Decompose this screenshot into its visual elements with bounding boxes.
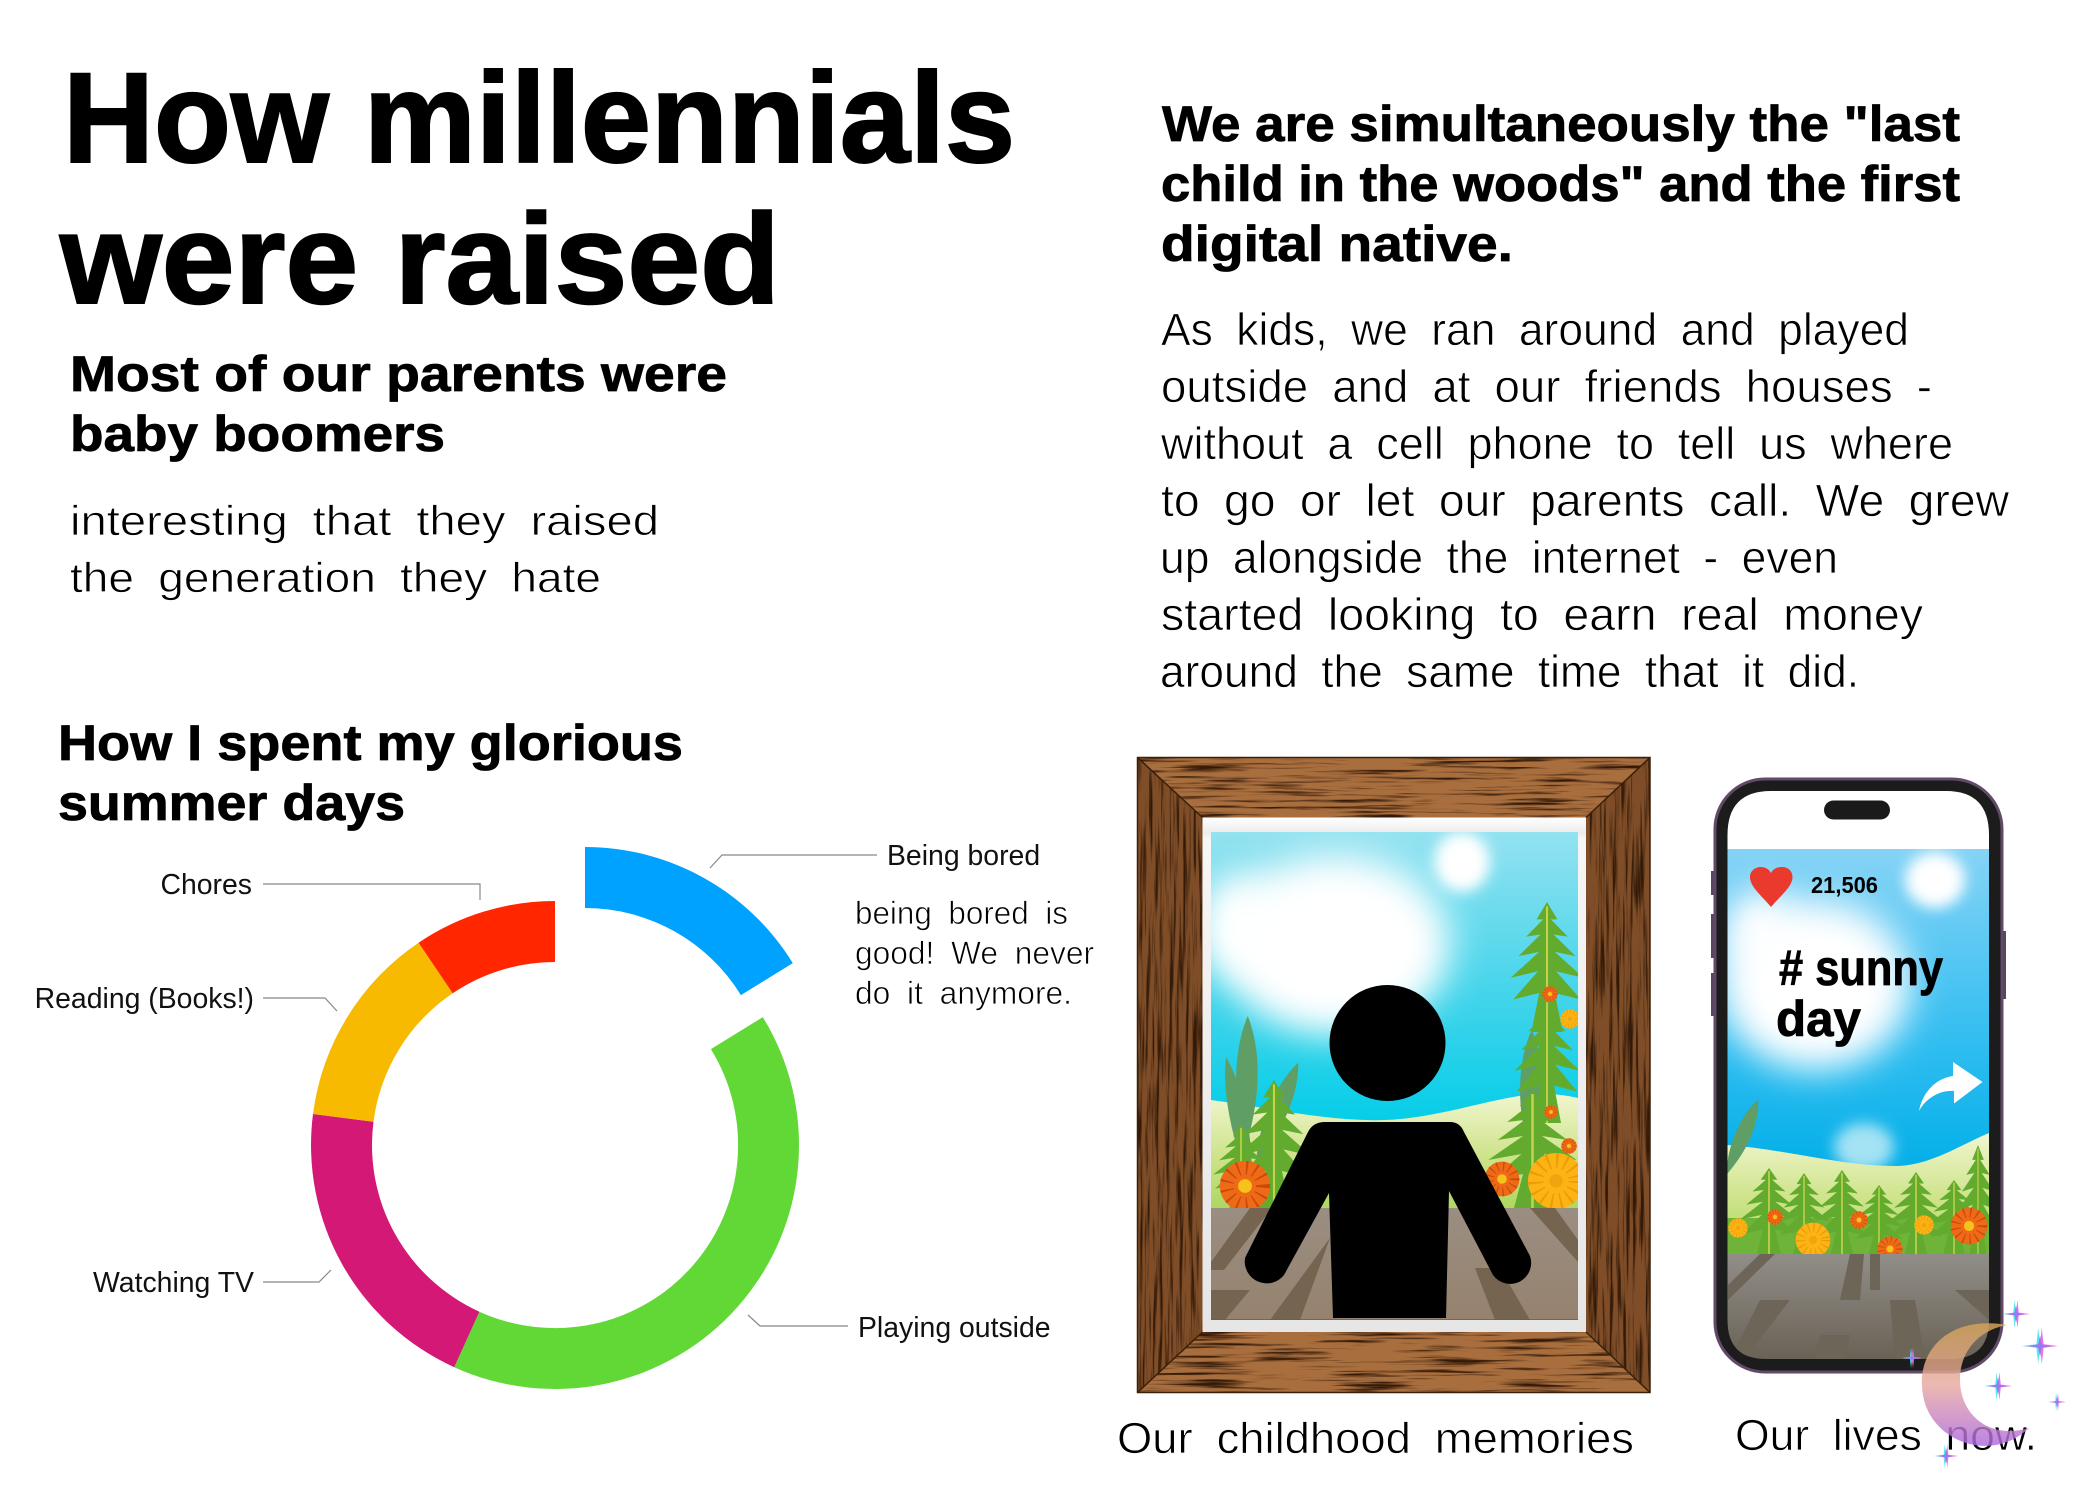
title (59, 47, 1015, 331)
heading: parents: Most of our parents were (70, 346, 727, 402)
callout: being bored: being bored is (855, 895, 1068, 931)
text block: parents note: the generation they hate (70, 554, 601, 601)
text block: childhood story: As kids, we ran around and played (1161, 304, 1909, 355)
heading: summer days (58, 715, 683, 831)
label: playing outside: Playing outside (858, 1312, 1051, 1344)
slice: playing outside (454, 1017, 799, 1389)
label: watching TV (93, 1267, 331, 1299)
side buttons (1711, 871, 2006, 1016)
phone body (1715, 779, 2002, 1372)
text block: childhood story: around the same time that it did. (1160, 646, 1859, 697)
text block: childhood story: up alongside the internet - even (1160, 532, 1838, 583)
slice: chores (419, 901, 555, 993)
decoration: crescent moon with sparkles (1902, 1300, 2066, 1468)
like count: 21,506 (1811, 872, 1878, 898)
title: How millennials (63, 47, 1015, 190)
donut chart: summer days (35, 840, 1051, 1389)
label: reading: Reading (Books!) (35, 983, 254, 1015)
text block: childhood story: outside and at our friends houses - (1161, 361, 1932, 412)
phone (1711, 779, 2006, 1372)
label: being bored (710, 840, 1040, 872)
callout: being bored (855, 895, 1094, 1011)
text block: parents note (70, 497, 659, 601)
slice: watching TV (311, 1114, 479, 1367)
label: watching TV: Watching TV (93, 1267, 254, 1299)
mat (1202, 818, 1586, 1332)
dynamic island (1824, 800, 1890, 820)
caption: lives now: Our lives now. (1735, 1411, 2037, 1460)
callout: being bored: do it anymore. (855, 975, 1072, 1011)
scene: sunny post (1720, 849, 1999, 1359)
label: being bored: Being bored (887, 840, 1040, 872)
callout: being bored: good! We never (855, 935, 1094, 971)
hashtag text: day (1776, 991, 1861, 1047)
hashtag text (1776, 940, 1943, 1047)
label: chores: Chores (160, 869, 252, 901)
heading: parents (70, 346, 727, 462)
icon: heart (1750, 867, 1792, 907)
picture frame: childhood memories (1138, 758, 1650, 1392)
slice: being bored (585, 847, 793, 995)
slice: reading (313, 943, 453, 1122)
wood frame (1138, 758, 1650, 1392)
heading: summer days: How I spent my glorious (58, 715, 683, 771)
icon: share arrow (1919, 1062, 1982, 1111)
hashtag text: # sunny (1779, 940, 1943, 996)
heading: digital native: child in the woods" and the first (1161, 156, 1960, 212)
heading: digital native (1161, 96, 1960, 272)
scene: sunny garden (1200, 832, 1584, 1320)
heading: parents: baby boomers (70, 406, 445, 462)
screen (1728, 791, 1989, 849)
caption: childhood memories: Our childhood memories (1117, 1414, 1634, 1463)
figure silhouette (1245, 985, 1531, 1318)
text block: childhood story (1160, 304, 2010, 697)
text block: childhood story: to go or let our parents call. We grew (1161, 475, 2010, 526)
heading: summer days: summer days (58, 775, 405, 831)
label: playing outside (748, 1312, 1051, 1344)
text block: childhood story: started looking to earn real money (1161, 589, 1924, 640)
text block: parents note: interesting that they raised (70, 497, 659, 544)
heading: digital native: digital native. (1161, 216, 1513, 272)
heading: digital native: We are simultaneously the "last (1162, 96, 1960, 152)
text block: childhood story: without a cell phone to tell us where (1160, 418, 1953, 469)
label: chores (160, 869, 480, 901)
title: were raised (59, 188, 780, 331)
